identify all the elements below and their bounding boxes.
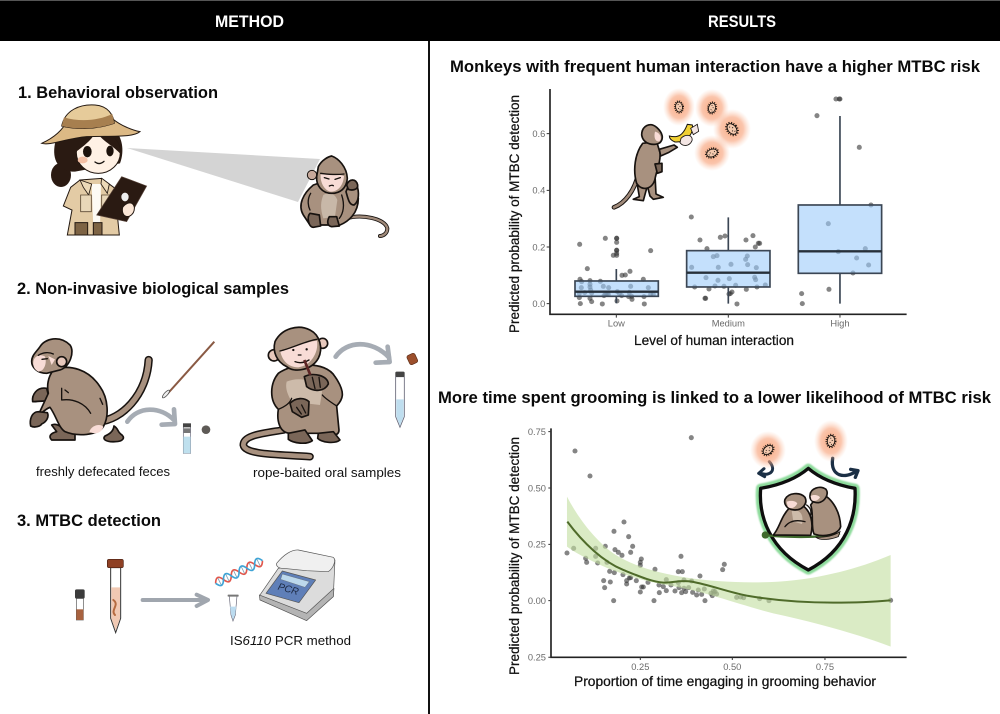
swab [161,342,214,399]
rope [304,360,310,375]
fecal pellet [202,425,210,434]
header band [0,0,1000,41]
icon: grooming monkeys in protective shield [759,458,858,570]
box: medium [687,217,770,304]
axes and ticks: 0.0 [532,299,545,309]
box: low [575,269,658,303]
box: high [798,116,882,304]
icon: field researcher with tablet [42,105,147,235]
fit line [567,522,891,603]
icon: seated monkey observed [301,156,387,236]
y axis label: chart 2: Predicted probability of MTBC detection [506,437,522,675]
bacteria cluster: chart 1 [663,88,751,171]
box plot [532,89,907,329]
confidence ribbon [567,497,891,647]
axes and ticks [528,427,907,672]
monkey [614,125,677,207]
arrow: bacterium deflected left [759,462,773,477]
icon: monkey reaching for banana with bacteria [614,124,699,207]
axes and ticks: 0.4 [532,186,545,196]
axes and ticks: 0.00 [528,596,546,606]
title: grooming result: More time spent grooming is linked to a lower likelihood of MTBC risk [438,388,992,407]
microtube [228,595,239,621]
heading: step 1: 1. Behavioral observation [18,83,218,102]
banana [669,124,693,142]
PCR machine: PCR [276,582,300,598]
axes and ticks: Low [608,319,625,329]
panel: oral sampling [243,327,418,457]
axes and ticks: 0.25 [528,653,546,663]
shield [760,468,855,570]
axes and ticks: 0.25 [528,540,546,550]
axes and ticks: 0.50 [723,662,741,672]
axes and ticks: 0.25 [631,662,649,672]
y axis label: chart 1: Predicted probability of MTBC detection [506,95,522,333]
title: human interaction result: Monkeys with frequent human interaction have a higher MTBC risk [450,57,981,76]
axes and ticks: 0.2 [532,242,545,252]
axes and ticks: 0.50 [528,483,546,493]
monkey chewing rope [243,327,342,457]
header: results: RESULTS [708,13,776,31]
bacteria: chart 2 [750,420,848,469]
heading: step 3: 3. MTBC detection [17,511,161,530]
panel: PCR detection [75,550,335,633]
header: method: METHOD [215,13,284,31]
sample tube [183,423,191,453]
arrow: feces to tube [127,409,175,425]
caption: feces: freshly defecated feces [36,464,170,479]
jittered points [577,96,873,307]
heading: step 2: 2. Non-invasive biological samples [17,279,289,298]
axes and ticks: 0.75 [816,662,834,672]
rope piece [406,353,418,365]
gaze cone [127,148,320,202]
arrow: oral to tube [336,344,390,363]
large tube [107,559,123,633]
panel: fecal sampling [30,339,214,453]
monkey with tail [30,339,149,440]
axes and ticks [532,89,907,329]
PCR machine [259,550,335,621]
sample tube [395,372,405,427]
axes and ticks: 0.75 [528,427,546,437]
grooming monkeys [773,487,841,540]
dna helix [214,557,264,587]
arrow: bacterium deflected right [832,458,858,477]
small tube [75,589,85,620]
x axis label: chart 1: Level of human interaction [634,332,794,348]
regression chart [528,427,907,672]
axes and ticks: Medium [712,319,745,329]
branch [762,531,840,539]
axes and ticks: High [830,319,850,329]
caption: IS6110 PCR method: IS6110 PCR method [230,633,351,648]
x axis label: chart 2: Proportion of time engaging in grooming behavior [574,673,876,689]
caption: oral: rope-baited oral samples [253,465,402,480]
data points [564,435,893,603]
feces [104,426,123,442]
arrow [143,595,208,606]
axes and ticks: 0.6 [532,129,545,139]
human hand [680,124,699,145]
